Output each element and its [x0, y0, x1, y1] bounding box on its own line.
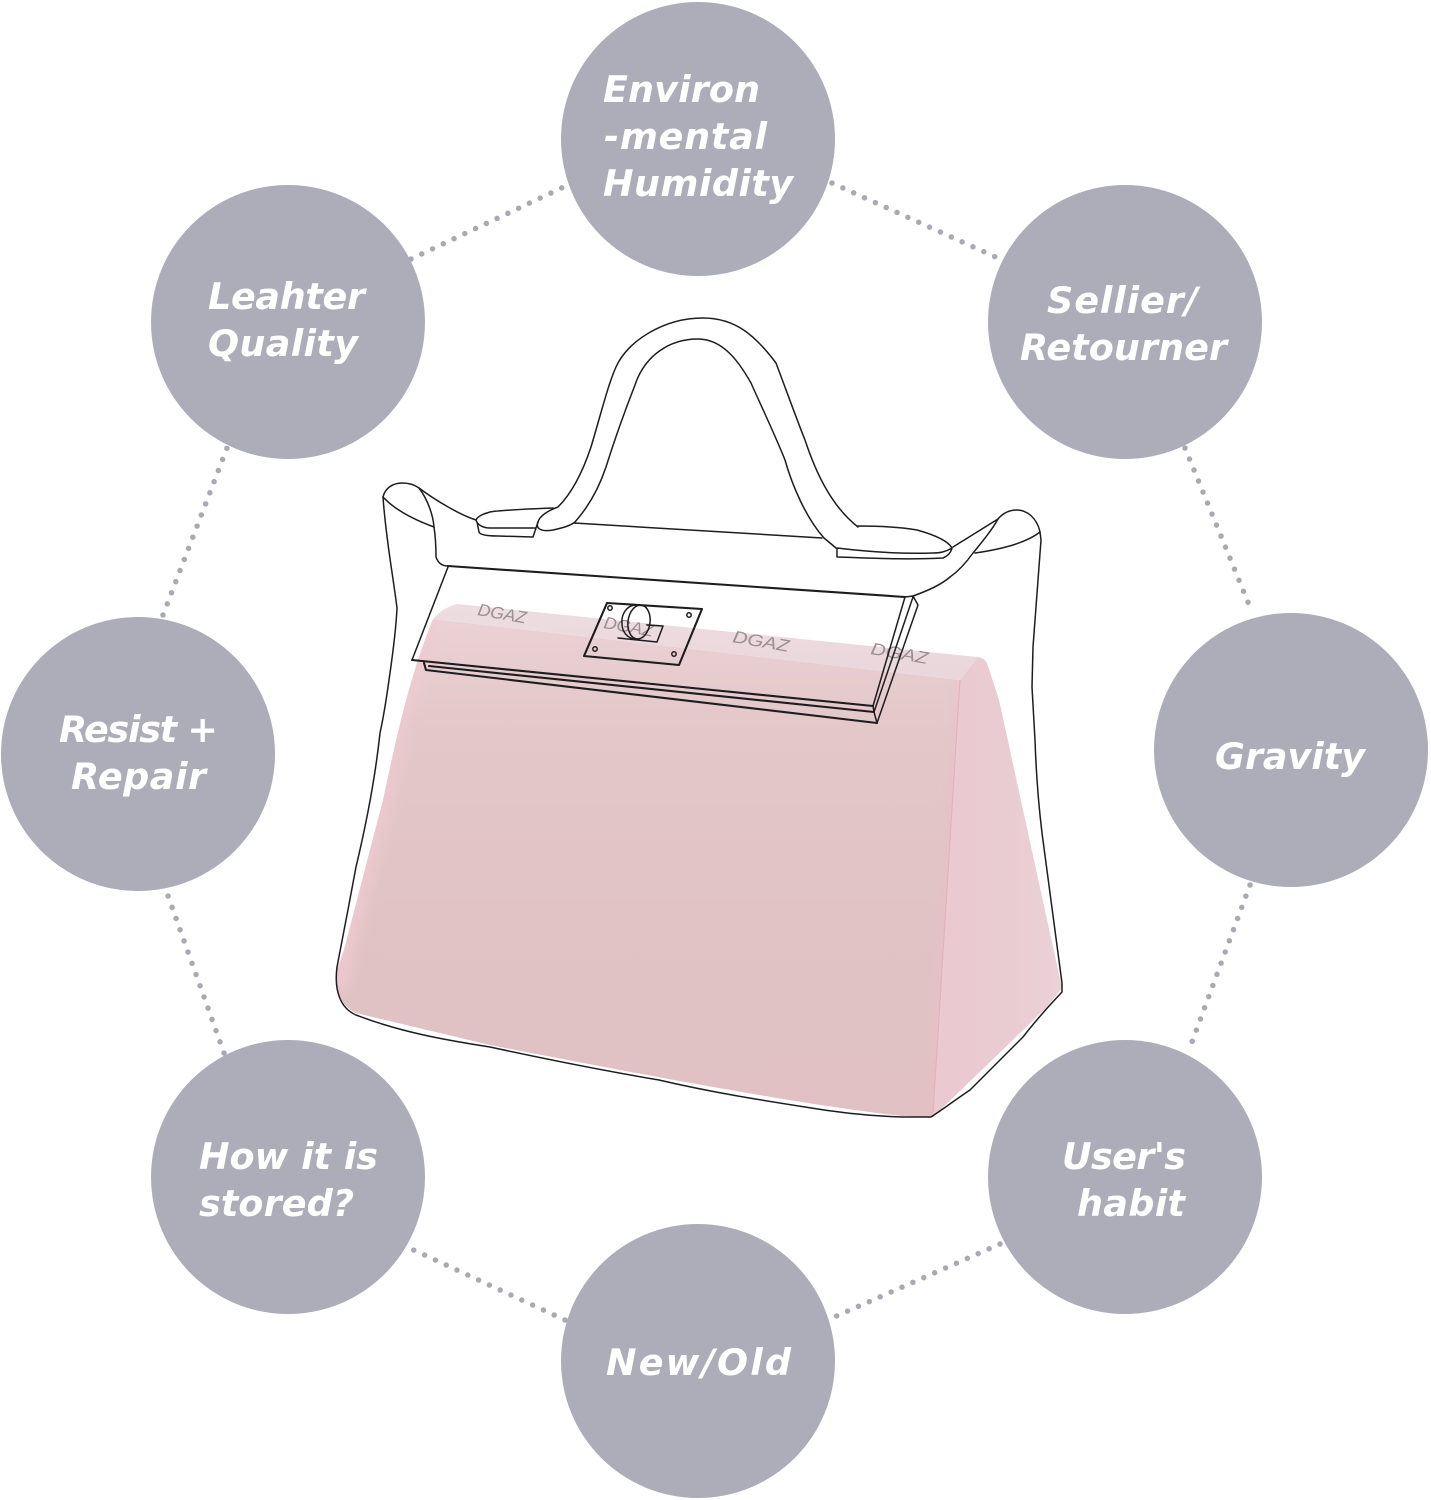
- circle: User's habit: habit: [1077, 1182, 1187, 1225]
- circle: How it is stored: How it is: [199, 1135, 378, 1178]
- circle: Leather Quality: Leahter: [208, 275, 367, 318]
- clasp plate: [584, 603, 702, 665]
- insert front face: [337, 619, 960, 1117]
- circle: How it is stored: stored?: [199, 1182, 354, 1225]
- circle: Sellier/Retourner: [988, 185, 1262, 459]
- clasp tab: [618, 625, 663, 642]
- left ear strap: [383, 488, 476, 527]
- bag body outline: [336, 497, 1062, 1117]
- circle: Resist + Repair: Repair: [71, 755, 208, 798]
- circle: New/Old: [561, 1224, 835, 1498]
- bag outline drawing: [336, 318, 1062, 1117]
- insert left edge highlight: [337, 619, 960, 1117]
- left handle tab: [476, 508, 553, 537]
- flap thick edge: [873, 596, 918, 723]
- circle: Environmental Humidity: Humidity: [603, 162, 795, 205]
- circle: How it is stored: [151, 1040, 425, 1314]
- right ear: [953, 510, 1040, 553]
- flap top seam: [448, 566, 905, 597]
- flap: [412, 567, 905, 706]
- circle: Gravity: Gravity: [1215, 735, 1367, 778]
- DGAZ label centre: DGAZ: [602, 613, 655, 641]
- circle: Resist + Repair: [1, 617, 275, 891]
- circle: Leather Quality: [151, 185, 425, 459]
- circle: Gravity: [1154, 613, 1428, 887]
- insert top band: [433, 604, 978, 680]
- right ear strap: [913, 519, 998, 596]
- DGAZ label left: DGAZ: [476, 600, 528, 628]
- insert fold line: [933, 680, 960, 1113]
- top handle: [538, 318, 858, 527]
- dotted connector ring: [163, 183, 1252, 1320]
- right handle tab: [837, 526, 952, 559]
- flap underside lip: [412, 660, 877, 723]
- circle: Sellier/Retourner: Sellier/: [1047, 279, 1201, 322]
- DGAZ label mid right: DGAZ: [731, 627, 791, 656]
- circle: Environmental Humidity: -mental: [604, 115, 767, 158]
- circle: Environmental Humidity: Environ: [603, 68, 760, 111]
- top edge line: [574, 523, 822, 538]
- circle: User's habit: [988, 1040, 1262, 1314]
- top handle inner edge: [537, 339, 836, 548]
- clasp ring: [622, 604, 652, 640]
- DGAZ label right: DGAZ: [869, 639, 930, 668]
- clasp screw holes: [593, 606, 691, 656]
- circle: Leather Quality: Quality: [208, 322, 360, 365]
- circle: User's habit: User's: [1062, 1135, 1186, 1178]
- bag insert: pink shaper: [337, 600, 1062, 1117]
- circle: Sellier/Retourner: Retourner: [1020, 326, 1229, 369]
- circle: New/Old: New/Old: [606, 1341, 792, 1384]
- circle: Resist + Repair: Resist +: [59, 708, 218, 751]
- circle: Environmental Humidity: [561, 2, 835, 276]
- left ear: [383, 483, 448, 566]
- insert side face: [933, 657, 1062, 1117]
